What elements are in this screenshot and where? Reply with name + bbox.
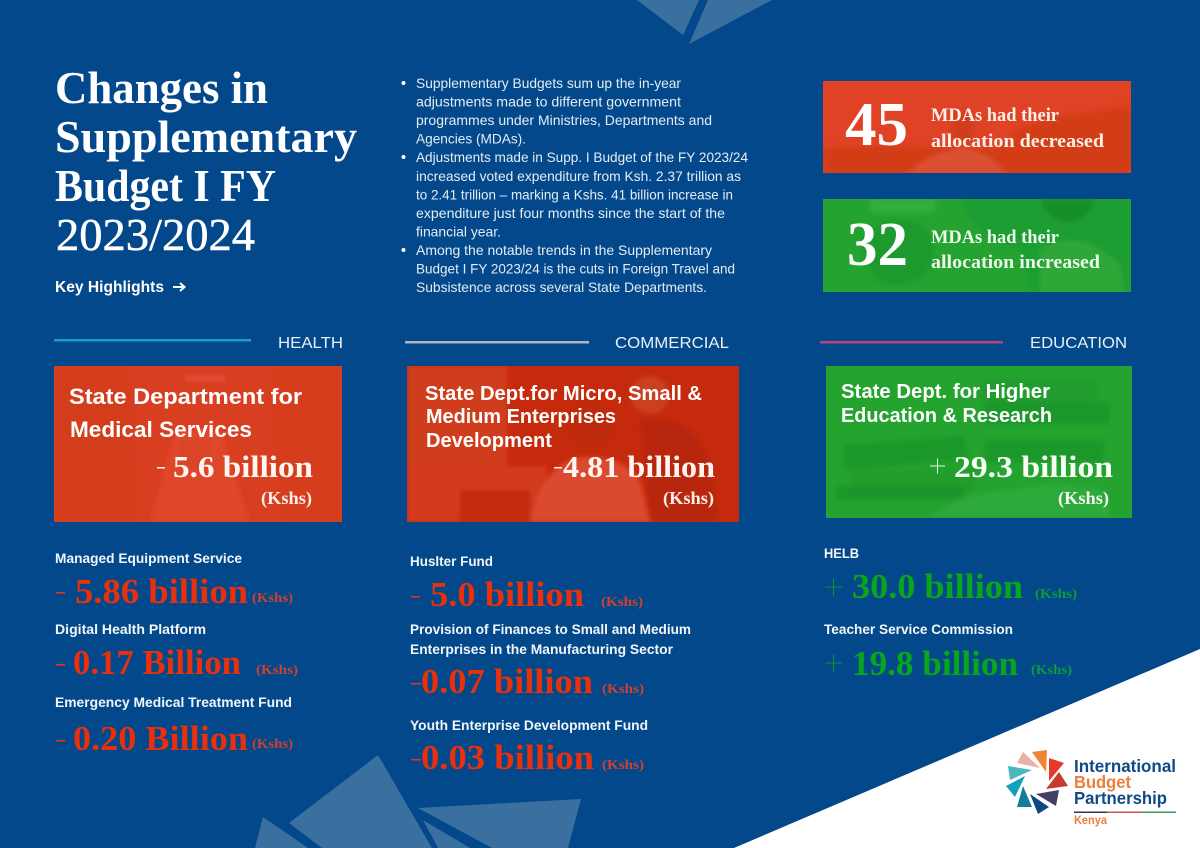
item: digital health platform: Digital Health Platform — [55, 621, 206, 637]
intro bullet list — [402, 75, 748, 295]
panel: state department for medical services: State Department for — [69, 384, 302, 409]
panel: state dept for higher education and research: State Dept. for Higher — [841, 381, 1050, 403]
item: hustler fund: Huslter Fund — [410, 553, 493, 569]
commercial line items — [410, 553, 691, 777]
item: provision of finances: 0.07 billion — [421, 662, 593, 701]
panel: state dept for micro small and medium enterprises: (Kshs) — [663, 488, 714, 509]
stat card: 45 MDAs decreased: 45 — [845, 91, 908, 159]
logo wordmark — [1074, 756, 1176, 827]
item: provision of finances — [410, 621, 691, 701]
health line items — [55, 550, 298, 758]
item: helb — [824, 545, 1077, 606]
white corner triangle — [734, 649, 1200, 848]
stat card: 45 MDAs decreased: MDAs had their — [931, 105, 1060, 126]
item: digital health platform — [55, 621, 298, 682]
title: Budget I FY — [55, 160, 276, 211]
item: hustler fund: (Kshs) — [601, 595, 643, 610]
logo wordmark: International — [1074, 756, 1176, 776]
item: emergency medical treatment fund — [55, 694, 293, 758]
stat card: 32 MDAs increased: MDAs had their — [931, 227, 1060, 248]
item: provision of finances: Provision of Finances to Small and Medium — [410, 621, 691, 637]
panel: state dept for higher education and research: (Kshs) — [1058, 488, 1109, 509]
panel: state dept for micro small and medium enterprises: Medium Enterprises — [426, 406, 616, 428]
intro bullet list: increased voted expenditure from Ksh. 2.37 trillion as — [416, 168, 741, 184]
intro bullet list: Subsistence across several State Departments. — [416, 279, 707, 295]
intro bullet list: to 2.41 trillion – marking a Kshs. 41 billion increase in — [416, 186, 733, 202]
item: teacher service commission: (Kshs) — [1031, 663, 1072, 678]
intro bullet list: Budget I FY 2023/24 is the cuts in Foreign Travel and — [416, 260, 735, 276]
panel: state department for medical services — [54, 366, 342, 522]
item: managed equipment service: Managed Equipment Service — [55, 550, 242, 566]
logo: international budget partnership kenya — [1006, 750, 1176, 827]
section header: commercial: COMMERCIAL — [615, 335, 729, 352]
item: helb: HELB — [824, 545, 859, 561]
item: provision of finances: Enterprises in the Manufacturing Sector — [410, 641, 674, 657]
stat card: 32 MDAs increased: 32 — [847, 211, 908, 279]
education line items — [824, 545, 1077, 683]
intro bullet list: programmes under Ministries, Departments and — [416, 112, 712, 128]
item: youth enterprise development fund — [410, 717, 648, 777]
item: digital health platform: 0.17 Billion — [73, 643, 241, 682]
item: youth enterprise development fund: 0.03 billion — [421, 738, 594, 777]
intro bullet list: adjustments made to different government — [416, 94, 681, 110]
item: emergency medical treatment fund: (Kshs) — [252, 737, 293, 752]
intro bullet list: Adjustments made in Supp. I Budget of the FY 2023/24 — [416, 149, 748, 165]
panel: state dept for higher education and research — [826, 366, 1132, 518]
section header: health: HEALTH — [278, 335, 343, 352]
title — [55, 62, 357, 260]
item: managed equipment service: (Kshs) — [252, 591, 293, 606]
stat card: 32 MDAs increased — [823, 199, 1131, 292]
item: emergency medical treatment fund: Emergency Medical Treatment Fund — [55, 694, 292, 710]
panel: state department for medical services: Medical Services — [70, 417, 252, 442]
item: managed equipment service: 5.86 billion — [75, 572, 248, 611]
panel: state department for medical services: 5.6 billion — [173, 449, 313, 484]
item: helb: 30.0 billion — [852, 567, 1023, 606]
panel: state dept for micro small and medium enterprises — [407, 366, 739, 522]
item: teacher service commission: 19.8 billion — [852, 644, 1018, 683]
intro bullet list: Among the notable trends in the Supplementary — [416, 242, 712, 258]
item: teacher service commission: Teacher Service Commission — [824, 621, 1013, 637]
section header: education: EDUCATION — [1030, 335, 1127, 352]
title: 2023/2024 — [56, 209, 255, 260]
item: hustler fund — [410, 553, 643, 614]
intro bullet list: Supplementary Budgets sum up the in-year — [416, 75, 681, 91]
item: youth enterprise development fund: (Kshs) — [602, 758, 644, 773]
logo wordmark: Partnership — [1074, 788, 1167, 808]
panel: state dept for micro small and medium enterprises: 4.81 billion — [563, 449, 715, 484]
key highlights label with arrow: Key Highlights — [55, 279, 164, 296]
item: provision of finances: (Kshs) — [602, 682, 644, 697]
item: youth enterprise development fund: Youth Enterprise Development Fund — [410, 717, 648, 733]
logo wordmark: Kenya — [1074, 813, 1107, 827]
panel: state department for medical services: (Kshs) — [261, 488, 312, 509]
item: emergency medical treatment fund: 0.20 Billion — [73, 719, 248, 758]
stat card: 32 MDAs increased: allocation increased — [931, 252, 1100, 273]
item: teacher service commission — [824, 621, 1072, 683]
logo wordmark: Budget — [1074, 772, 1131, 792]
panel: state dept for micro small and medium enterprises: Development — [426, 430, 552, 452]
item: managed equipment service — [55, 550, 293, 611]
item: digital health platform: (Kshs) — [256, 663, 298, 678]
panel: state dept for higher education and research: 29.3 billion — [954, 449, 1113, 484]
decorative shapes: bottom — [255, 755, 581, 848]
item: helb: (Kshs) — [1035, 587, 1077, 602]
title: Supplementary — [55, 111, 357, 162]
intro bullet list: financial year. — [416, 223, 501, 239]
decorative shapes: top — [637, 0, 772, 44]
panel: state dept for higher education and research: Education & Research — [841, 405, 1052, 427]
stat card: 45 MDAs decreased — [823, 81, 1131, 173]
item: hustler fund: 5.0 billion — [430, 575, 584, 614]
icon: pinwheel — [1006, 750, 1068, 814]
intro bullet list: expenditure just four months since the start of the — [416, 205, 725, 221]
intro bullet list: Agencies (MDAs). — [416, 131, 526, 147]
stat card: 45 MDAs decreased: allocation decreased — [931, 131, 1104, 152]
panel: state dept for micro small and medium enterprises: State Dept.for Micro, Small & — [425, 383, 702, 405]
title: Changes in — [55, 62, 268, 113]
